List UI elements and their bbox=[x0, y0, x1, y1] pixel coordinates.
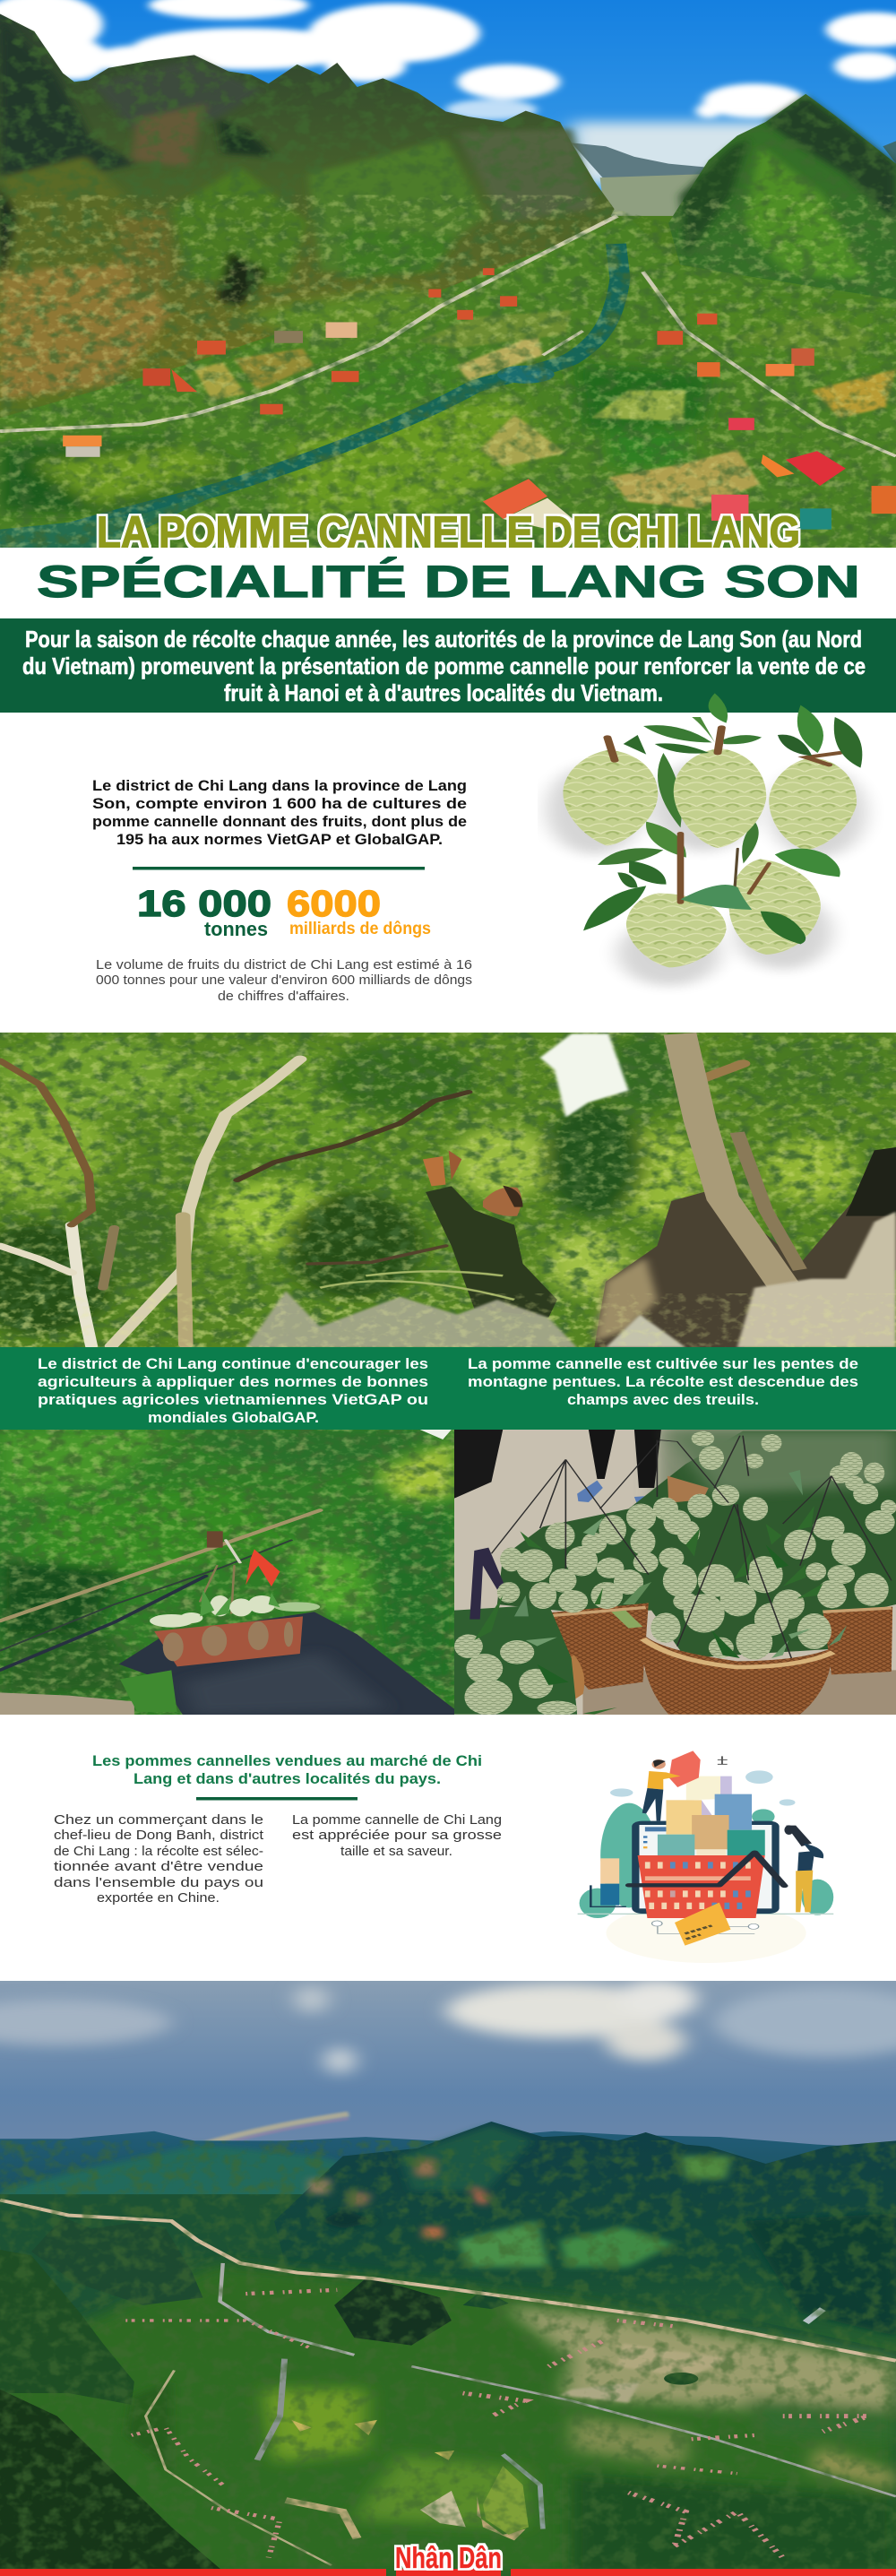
clouds bbox=[610, 1770, 796, 1806]
stat: 16 000 tonnes bbox=[137, 883, 271, 940]
rainbow bbox=[108, 2114, 349, 2181]
panel: captions band: pratiques agricoles vietnamiennes VietGAP ou bbox=[38, 1391, 428, 1408]
cables bbox=[0, 1510, 320, 1670]
farmer bbox=[423, 1150, 557, 1318]
river bbox=[17, 244, 620, 549]
stems and upper leaves bbox=[607, 728, 840, 903]
title: La pomme cannelle de Chi Lang: LA POMME CANNELLE DE CHI LANG bbox=[97, 507, 800, 558]
illustration: custard apples with leaves bbox=[538, 694, 874, 990]
stat: 6000 milliards de dôngs: milliards de dôngs bbox=[289, 920, 431, 938]
stat: 6000 milliards de dôngs bbox=[287, 883, 431, 938]
foreground rocks and grass bbox=[246, 1212, 896, 1347]
valley fields bbox=[0, 2263, 896, 2576]
photo: aerial view of Chi Lang valley bbox=[0, 0, 896, 548]
distant mountains bbox=[572, 143, 706, 181]
stat: 6000 milliards de dôngs: 6000 bbox=[287, 883, 381, 924]
roads bbox=[0, 216, 896, 456]
orchards bbox=[194, 310, 896, 508]
hanging wires bbox=[491, 1436, 892, 1658]
leaves bbox=[474, 1470, 847, 1715]
figure: woman with telescope bbox=[784, 1825, 823, 1912]
stat: 16 000 tonnes: 16 000 bbox=[137, 883, 271, 924]
text block: volume estimate bbox=[96, 957, 472, 1004]
right mountain bbox=[668, 94, 896, 299]
legs and sandals bbox=[577, 1430, 661, 1504]
stat: 16 000 tonnes: tonnes bbox=[204, 918, 268, 940]
footer: red bar bbox=[0, 2569, 896, 2576]
photo: aerial view of Lang Son valley with rainbow bbox=[0, 1981, 896, 2576]
baskets bbox=[543, 1603, 649, 1690]
text block: size and flavour bbox=[292, 1812, 502, 1859]
flag bbox=[246, 1549, 280, 1586]
fruit 3 bbox=[769, 757, 857, 850]
text block: trader in Dong Banh: chef-lieu de Dong Banh, district bbox=[54, 1828, 264, 1843]
photo: farmer picking fruit in the trees bbox=[0, 1033, 896, 1347]
panel: captions band: montagne pentues. La récolte est descendue des bbox=[468, 1373, 858, 1390]
figure: man lifting box bbox=[642, 1759, 680, 1821]
text block: trader in Dong Banh: dans l'ensemble du pays ou bbox=[54, 1875, 263, 1890]
roads bbox=[0, 2200, 896, 2565]
far mountain ranges bbox=[0, 2131, 896, 2244]
panel: captions band: La pomme cannelle est cultivée sur les pentes de bbox=[468, 1355, 858, 1372]
clouds bbox=[0, 1980, 896, 2073]
fruit 1 bbox=[563, 750, 658, 845]
text block: size and flavour: La pomme cannelle de Chi Lang bbox=[292, 1812, 502, 1828]
village houses bbox=[63, 268, 896, 530]
text block: volume estimate: 000 tonnes pour une valeur d'environ 600 milliards de dôngs bbox=[96, 972, 472, 988]
main trunk bbox=[680, 1033, 783, 1284]
fruit clusters bbox=[454, 1431, 896, 1716]
text block: size and flavour: taille et sa saveur. bbox=[340, 1844, 452, 1859]
text block: district figures: Son, compte environ 1 600 ha de cultures de bbox=[92, 795, 467, 812]
lower leaves bbox=[583, 753, 759, 930]
sky gap bbox=[540, 1033, 629, 1118]
red basket bbox=[629, 1853, 784, 1918]
panel: captions band bbox=[0, 1347, 896, 1430]
branches and trunks bbox=[0, 1059, 743, 1346]
credit card bbox=[652, 1903, 759, 1946]
villages bbox=[125, 2290, 868, 2558]
illustration: shopping basket with goods and figures bbox=[577, 1750, 833, 1963]
dark karst peaks bbox=[31, 2217, 202, 2305]
rock bbox=[119, 1612, 454, 1715]
text block: trader in Dong Banh: tionnée avant d'être vendue bbox=[54, 1859, 263, 1874]
text block: trader in Dong Banh: de Chi Lang : la récolte est sélec- bbox=[54, 1844, 263, 1859]
person at top left bbox=[454, 1430, 503, 1499]
main mountain range bbox=[274, 2122, 896, 2351]
panel: introduction band: fruit à Hanoi et à d'autres localités du Vietnam. bbox=[224, 679, 663, 706]
text block: district figures: pomme cannelle donnant des fruits, dont plus de bbox=[92, 813, 467, 830]
fruit 4 bbox=[626, 894, 727, 967]
rock behind the farmer bbox=[594, 1150, 896, 1347]
stacked boxes bbox=[686, 1776, 732, 1800]
text block: trader in Dong Banh: exportée en Chine. bbox=[97, 1890, 220, 1906]
text block: volume estimate: de chiffres d'affaires. bbox=[218, 989, 349, 1004]
left mountain range bbox=[0, 14, 615, 436]
panel: captions band: Le district de Chi Lang continue d'encourager les bbox=[38, 1355, 428, 1372]
fruit in basket bbox=[150, 1595, 320, 1628]
side trolley bbox=[590, 1858, 626, 1906]
basket bbox=[154, 1616, 303, 1666]
text block: volume estimate: Le volume de fruits du district de Chi Lang est estimé à 16 bbox=[96, 957, 472, 972]
text block: district figures: 195 ha aux normes VietGAP et GlobalGAP. bbox=[116, 831, 443, 848]
panel: market heading bbox=[92, 1752, 482, 1787]
panel: captions band: agriculteurs à appliquer des normes de bonnes bbox=[38, 1373, 428, 1390]
photo: winch basket on a cable over the forest bbox=[0, 1430, 454, 1715]
text block: trader in Dong Banh: Chez un commerçant dans le bbox=[54, 1812, 263, 1828]
fruit 5 bbox=[729, 859, 821, 955]
back foliage mass bbox=[497, 1431, 896, 1658]
fruit 2 bbox=[674, 748, 766, 848]
front basket bbox=[514, 1655, 584, 1709]
panel: captions band: champs avec des treuils. bbox=[567, 1391, 759, 1408]
fields and terraces bbox=[286, 2344, 731, 2540]
subtitle: Spécialité de Lang Son: SPÉCIALITÉ DE LANG SON bbox=[37, 557, 860, 607]
valley floor bbox=[0, 216, 896, 549]
text block: size and flavour: est appréciée pour sa grosse bbox=[292, 1828, 502, 1843]
white title band bbox=[0, 548, 896, 618]
panel: introduction band bbox=[0, 618, 896, 713]
panel: market heading: Lang et dans d'autres localités du pays. bbox=[134, 1770, 441, 1787]
text block: district figures bbox=[92, 777, 467, 848]
panel: captions band: mondiales GlobalGAP. bbox=[148, 1409, 319, 1426]
text block: district figures: Le district de Chi Lang dans la province de Lang bbox=[92, 777, 467, 794]
stone wall bbox=[0, 1692, 134, 1715]
hanging strap bbox=[470, 1548, 505, 1620]
text block: trader in Dong Banh bbox=[54, 1812, 264, 1906]
logo: Nhân Dân: Nhân Dân bbox=[395, 2541, 502, 2574]
tablet bbox=[632, 1821, 780, 1914]
panel: market heading: Les pommes cannelles vendues au marché de Chi bbox=[92, 1752, 482, 1769]
photo: custard apples in baskets at the market bbox=[454, 1430, 896, 1715]
